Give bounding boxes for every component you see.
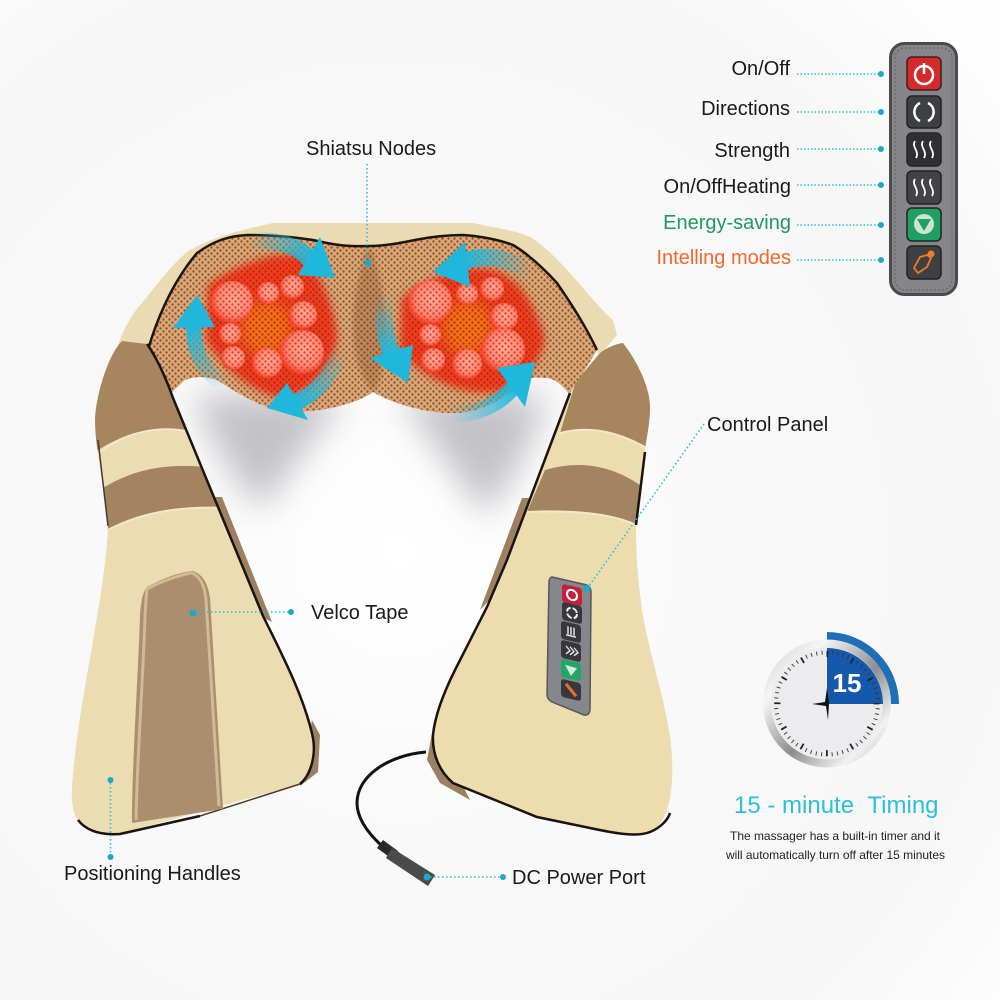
legend: Energy-saving: Energy-saving xyxy=(663,212,791,234)
legend: Intelling modes: Intelling modes xyxy=(656,247,791,269)
arrow top right xyxy=(433,242,530,287)
button: heating xyxy=(907,171,941,204)
label: Velco Tape: Velco Tape xyxy=(311,602,408,624)
blue 15 minute wedge xyxy=(827,648,883,704)
clock hands xyxy=(812,688,829,720)
timing description: will automatically turn off after 15 minutes xyxy=(725,848,945,862)
legend: Strength: Strength xyxy=(714,140,790,162)
button: directions xyxy=(907,96,941,128)
left arm piping xyxy=(78,344,314,834)
button legend labels xyxy=(656,58,884,269)
timing description xyxy=(725,829,945,862)
power cable xyxy=(357,752,426,846)
left arm outer seam xyxy=(98,440,300,816)
velcro tape xyxy=(132,571,223,823)
label: DC Power Port xyxy=(424,867,646,889)
label: Positioning Handles: Positioning Handles xyxy=(64,863,241,885)
button: intelligent modes xyxy=(907,246,941,279)
legend: Directions: Directions xyxy=(701,98,790,120)
arrow bottom left xyxy=(267,350,340,420)
button: strength xyxy=(907,133,941,166)
legend: On/Off: On/Off xyxy=(731,58,790,80)
label: Control Panel xyxy=(584,414,828,592)
legend: Intelling modes xyxy=(656,247,884,269)
label: DC Power Port: DC Power Port xyxy=(512,867,646,889)
left arm xyxy=(72,341,313,833)
left heat nodes xyxy=(211,275,324,378)
large control panel xyxy=(890,44,956,294)
label: Velco Tape xyxy=(190,602,408,624)
DC power connector xyxy=(380,844,435,886)
drop shadow under massager xyxy=(195,395,545,515)
legend: On/OffHeating xyxy=(664,176,884,198)
right heat nodes xyxy=(408,277,525,379)
timer number: 15 xyxy=(833,668,861,698)
label: Shiatsu Nodes: Shiatsu Nodes xyxy=(306,138,436,160)
legend: Energy-saving xyxy=(663,212,884,234)
button: energy-saving xyxy=(907,208,941,241)
right arm xyxy=(425,335,680,840)
mesh black piping xyxy=(148,235,597,350)
massager product xyxy=(60,223,680,886)
timing heading: 15 - minute Timing xyxy=(734,792,939,819)
legend: Strength xyxy=(714,140,884,162)
left back flap xyxy=(212,497,320,786)
timing description: The massager has a built-in timer and it xyxy=(730,829,941,843)
right back flap xyxy=(427,498,531,800)
blue time arc xyxy=(827,632,899,704)
arrow left xyxy=(173,295,225,385)
legend: On/Off xyxy=(731,58,884,80)
label: Shiatsu Nodes xyxy=(306,138,436,266)
legend: Directions xyxy=(701,98,884,120)
label: Control Panel: Control Panel xyxy=(707,414,828,436)
right arm piping xyxy=(433,393,670,835)
legend: On/OffHeating: On/OffHeating xyxy=(664,176,791,198)
arrow bottom right xyxy=(450,362,535,415)
circulation arrows xyxy=(173,237,535,420)
button: power xyxy=(907,57,941,90)
arrow top left xyxy=(250,237,335,278)
massage mesh xyxy=(150,236,597,414)
neck shell xyxy=(118,223,617,355)
timer dial xyxy=(763,632,899,768)
label: Positioning Handles xyxy=(64,777,241,885)
small control panel on strap xyxy=(547,577,591,715)
arrow centre xyxy=(370,295,413,383)
